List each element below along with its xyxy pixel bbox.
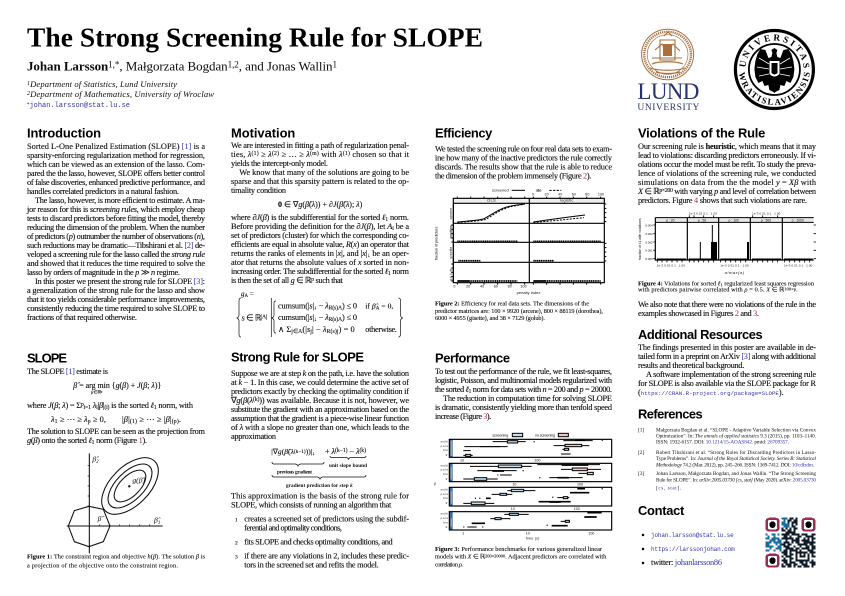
text block: ∇g(β(λ(k))) was available. Because it is not, however, we bbox=[230, 396, 409, 405]
text block: lasso by orders of magnitude in the p ≫ n regime. bbox=[27, 268, 180, 277]
text block: consistently reducing the time required to solve SLOPE to bbox=[27, 304, 205, 313]
axes labels: 1 bbox=[462, 531, 464, 535]
text block with equations: The SLOPE [1] estimate is bbox=[27, 367, 108, 376]
legend: active bbox=[536, 188, 542, 193]
axes labels: multi bbox=[441, 488, 448, 492]
text block: ine how many of the inactive predictors the rule correctly bbox=[435, 154, 613, 163]
axes labels: 100 bbox=[534, 458, 540, 462]
affiliations: 1Department of Statistics, Lund University bbox=[27, 79, 177, 89]
contact list: https://larssonjohan.com bbox=[651, 546, 735, 553]
text block: To test out the performance of the rule, we fit least-squares, bbox=[435, 367, 612, 376]
gradient approximation equation bbox=[271, 447, 367, 489]
reference list: Type Problems”. In: Journal of the Royal Statistical Society. Series B: Statistical bbox=[656, 455, 817, 462]
heading: Violations of the Rule bbox=[638, 125, 765, 140]
authors: Johan Larsson1,*, Małgorzata Bogdan1,2, and Jonas Wallin1 bbox=[27, 59, 337, 74]
icon: Lund seal bbox=[642, 29, 694, 80]
logo: University of Wroclaw seal: WRATISLAVIENSIS bbox=[739, 72, 810, 106]
figure caption: models with X ∈ ℝ200×20000. Adjacent predictors are correlated with bbox=[435, 553, 607, 560]
text block bbox=[637, 142, 817, 205]
legend: no screening bbox=[535, 432, 555, 437]
text block: X ∈ ℝp×200 with varying p and level of correlation between bbox=[637, 187, 817, 196]
text block: increasing order. The subdifferential for the sorted ℓ1 norm bbox=[231, 267, 410, 277]
chart: violations histogram: 1e-3 0.01 0.1 1.00 bbox=[657, 264, 685, 268]
reference list: Rule for SLOPE”. In: arXiv:2005.03730 [cs, stat] (May 2020). arXiv: 2005.03730 bbox=[656, 476, 816, 483]
text block: of predictors (p) outnumber the number of observations (n), bbox=[27, 232, 205, 241]
text block: A software implementation of the strong screening rule bbox=[646, 370, 816, 379]
chart: violations histogram: ρ : 500 bbox=[761, 218, 771, 222]
text block: In this poster we present the strong rule for SLOPE [3]: bbox=[35, 277, 205, 286]
panel: SLOPE bbox=[27, 351, 206, 570]
figure caption: a projection of the objective onto the constraint region. bbox=[27, 562, 178, 570]
axes labels: 10 bbox=[526, 531, 530, 535]
axes labels: 100 bbox=[588, 531, 594, 535]
subdifferential equation: ∧ Σj∈A(|sj| − λR(s)j) = 0 bbox=[278, 325, 355, 335]
figure caption: Figure 2: Efficiency for real data sets. The dimensions of the bbox=[435, 300, 589, 307]
figure caption bbox=[638, 280, 815, 294]
text block: of false discoveries, enhanced predictive performance, and bbox=[27, 178, 206, 187]
text block: Suppose we are at step k on the path, i.e. have the solution bbox=[231, 369, 410, 378]
subdifferential equation: if β̂A = 0, bbox=[365, 302, 393, 312]
text block bbox=[435, 145, 613, 181]
axes labels: g bbox=[446, 476, 448, 480]
numbered list: 2 bbox=[235, 541, 238, 547]
text block: sparse and that this sparsity pattern is related to the op- bbox=[231, 177, 409, 186]
text block: results and theoretical background. bbox=[638, 361, 744, 370]
gradient approximation equation: previous gradient bbox=[277, 470, 312, 476]
text block: the sorted ℓ1 norm for data sets with n = 200 and p = 20000. bbox=[435, 385, 612, 395]
text block bbox=[231, 141, 410, 285]
text block: lead to violations: discarding predictors erroneously. If vi- bbox=[638, 151, 816, 160]
panel: contact bbox=[638, 503, 816, 567]
chart: violations histogram bbox=[638, 212, 816, 275]
chart: violations histogram: 1e-3 0.01 0.1 1.00 bbox=[720, 264, 749, 268]
panel: efficiency bbox=[434, 125, 613, 322]
contact list: twitter: johanlarsson86 bbox=[651, 558, 722, 567]
axes labels: 10 bbox=[511, 507, 515, 511]
text block: such reductions may be dramatic—Tibshirani et al. [2] de- bbox=[27, 241, 205, 250]
text block: yields the intercept-only model. bbox=[231, 159, 328, 168]
axes labels: 10 bbox=[512, 482, 516, 486]
chart: fraction of predictors by penalty index: logistic bbox=[560, 198, 573, 203]
text block: Before providing the definition for the ∂J(β), let Ai be a bbox=[231, 222, 409, 232]
text block: logistic, Poisson, and multinomial models regularized with bbox=[435, 376, 613, 385]
header bbox=[27, 22, 483, 110]
text block: examples showcased in Figures 2 and 3. bbox=[638, 309, 759, 318]
text block: Our screening rule is heuristic, which means that it may bbox=[638, 142, 817, 151]
figure caption: with predictors pairwise correlated with ρ = 0.5. X ∈ ℝ100×p. bbox=[638, 287, 798, 294]
axes labels: time (s) bbox=[526, 537, 539, 541]
text block: assumption that the gradient is a piece-wise linear function bbox=[231, 414, 410, 423]
text block: (https://CRAN.R-project.org/package=SLOPE). bbox=[638, 388, 784, 397]
figure caption bbox=[435, 546, 607, 568]
subdifferential equation: otherwise. bbox=[365, 325, 397, 334]
axes labels: 10 bbox=[460, 458, 464, 462]
text block: for SLOPE is also available via the SLOPE package for R bbox=[638, 379, 816, 388]
text block bbox=[230, 369, 410, 441]
reference list: [3] bbox=[638, 471, 644, 477]
figure caption: predictor matrices are: 100 × 9920 (arcene), 800 × 88119 (dorothea), bbox=[435, 308, 603, 315]
panel: introduction bbox=[26, 125, 206, 322]
chart: constraint region and objective bbox=[67, 448, 168, 553]
axes labels: 100 bbox=[574, 507, 580, 511]
text block: returns the ranks of elements in |x|, and |x|↓ be an oper- bbox=[231, 249, 409, 259]
text block: a generalization of the strong rule for the lasso and show bbox=[27, 286, 205, 295]
figure caption: Figure 3: Performance benchmarks for various generalized linear bbox=[435, 546, 603, 553]
text block bbox=[26, 142, 206, 322]
chart: fraction of predictors by penalty index: penalty index bbox=[517, 290, 540, 295]
numbered list: ferential and optimality conditions, bbox=[244, 524, 342, 533]
text block: is dramatic, consistently yielding more than tenfold speed bbox=[435, 403, 613, 412]
gradient approximation equation: gradient prediction for step k bbox=[286, 483, 353, 489]
figure caption: Figure 1: The constraint region and objective h(β). The solution β is bbox=[27, 554, 206, 560]
text block: ator that returns the absolute values of x sorted in non- bbox=[231, 258, 409, 267]
text block: We know that many of the solutions are going to be bbox=[239, 168, 409, 177]
text block with equations: g(β) onto the sorted ℓ1 norm (Figure 1). bbox=[27, 436, 147, 446]
data curves bbox=[457, 204, 601, 281]
chart: fraction of predictors by penalty index: fraction of predictors bbox=[434, 227, 439, 260]
axes labels: multi bbox=[441, 440, 448, 444]
text block: 0 ∈ ∇g(β̂(λ)) + ∂J(β̂(λ); λ) bbox=[278, 200, 363, 209]
text block: We are interested in fitting a path of regularization penal- bbox=[231, 141, 409, 150]
subdifferential equation: gA = bbox=[241, 290, 254, 299]
text block bbox=[231, 492, 409, 510]
text block with equations: |β|(1) ≥ ⋯ ≥ |β|(p). bbox=[122, 415, 181, 425]
text block: set of predictors (cluster) for which the corresponding co- bbox=[231, 231, 409, 240]
chart: fraction of predictors by penalty index: golub bbox=[449, 269, 453, 281]
legend: screening bbox=[492, 432, 508, 437]
text block: increase (Figure 3). bbox=[435, 412, 491, 421]
chart: violations histogram: fraction of ℓ1 with violations bbox=[638, 218, 642, 260]
heading: Strong Rule for SLOPE bbox=[231, 350, 364, 365]
chart: violations histogram: 1e-3 0.01 0.1 1.00 bbox=[689, 212, 717, 216]
axes labels: bin bbox=[443, 472, 448, 476]
text block: pared the the lasso, however, SLOPE offers better control bbox=[27, 169, 206, 178]
chart: violations histogram: ρ : 50 bbox=[698, 218, 706, 222]
text block: lence of violations of the screening rule, we conducted bbox=[638, 169, 817, 178]
reference list: ISSN: 1932-6157. DOI: 10.1214/15-AOAS842. pmid: 26709357. bbox=[656, 439, 789, 445]
heading: References bbox=[638, 406, 703, 421]
text block: discards. The results show that the rule is able to reduce bbox=[435, 163, 612, 172]
chart: fraction of predictors by penalty index bbox=[434, 188, 606, 295]
chart: fraction of predictors by penalty index: 0 20 40 60 80 100 bbox=[532, 192, 604, 196]
text block: fractions of that required otherwise. bbox=[27, 313, 137, 322]
legend: screened bbox=[492, 188, 509, 193]
heading: Performance bbox=[435, 350, 510, 365]
chart: fraction of predictors by penalty index: OLS bbox=[487, 198, 496, 203]
text block with equations bbox=[27, 367, 206, 446]
gradient approximation equation: |∇g(β̂(λ(k−1)))|↓ bbox=[271, 447, 315, 457]
axes labels: ρ bbox=[434, 481, 436, 485]
chart: violations histogram: ρ : 1000 bbox=[792, 218, 804, 222]
heading: Additional Resources bbox=[638, 327, 763, 342]
logo: University of Wroclaw seal bbox=[734, 28, 815, 110]
text block: SLOPE, which consists of running an algorithm that bbox=[231, 501, 392, 510]
axes labels: bin bbox=[443, 496, 448, 500]
chart: violations histogram: ρ : 20 bbox=[666, 218, 675, 222]
text block: We tested the screening rule on four real data sets to exam- bbox=[435, 145, 612, 154]
figure caption: 6000 × 4955 (gisette), and 38 × 7129 (golub). bbox=[435, 315, 545, 322]
heading: Contact bbox=[638, 503, 685, 518]
text block: predictors exactly by checking the optimality condition if bbox=[231, 387, 409, 396]
panel: references bbox=[638, 406, 817, 491]
text block: predictors. Figure 4 shows that such violations are rare. bbox=[638, 196, 807, 205]
text block: This approximation is the basis of the strong rule for bbox=[231, 492, 409, 501]
text block: ties, λ(1) ≥ λ(2) ≥ … ≥ λ(m) with λ(1) chosen so that it bbox=[231, 150, 410, 159]
logo: University of Wroclaw seal: UNIVERSITAS bbox=[739, 34, 810, 68]
numbered list: fits SLOPE and checks optimality conditions, and bbox=[244, 538, 394, 547]
chart: violations histogram: 1e-3 0.01 0.1 1.00 bbox=[784, 264, 813, 268]
panel: violations of the rule bbox=[637, 125, 817, 318]
text block: and showed that it reduces the time required to solve the bbox=[27, 259, 205, 268]
reference list: [1] bbox=[638, 427, 644, 433]
panel: performance bbox=[434, 350, 613, 568]
axes labels: multi bbox=[441, 512, 448, 516]
axes labels: pois bbox=[441, 468, 448, 472]
reference list: [cs, stat]. bbox=[656, 485, 681, 491]
text block: which can be viewed as an extension of the lasso. Com- bbox=[27, 160, 205, 169]
chart: violations histogram: 0.002 bbox=[645, 240, 653, 244]
chart: fraction of predictors by penalty index: gisette bbox=[449, 247, 453, 259]
text block bbox=[638, 300, 816, 318]
figure caption bbox=[435, 300, 603, 322]
axes labels: 100 bbox=[577, 482, 583, 486]
reference list: [2] bbox=[638, 450, 644, 456]
panel: additional resources bbox=[638, 327, 817, 397]
wordmark: LUND bbox=[637, 79, 699, 104]
chart: constraint region and objective: β̂ bbox=[154, 516, 158, 525]
boxplots bbox=[463, 440, 603, 527]
text block: veloped a screening rule for the lasso called the strong rule bbox=[27, 250, 205, 259]
text block: olations occur the model must be refit. To study the preva- bbox=[638, 160, 816, 169]
chart: violations histogram: σ/max(σ) bbox=[725, 270, 745, 275]
logo: Lund University: UNIVERSITY bbox=[637, 103, 700, 113]
chart: violations histogram: 1e-3 0.01 0.1 1.00 bbox=[752, 212, 781, 216]
text block: that it too yields considerable performance improvements, bbox=[27, 295, 205, 304]
text block: Sorted L-One Penalized Estimation (SLOPE) [1] is a bbox=[27, 142, 205, 151]
numbered list: creates a screened set of predictors using the subdif- bbox=[244, 515, 409, 524]
title: The Strong Screening Rule for SLOPE bbox=[27, 22, 483, 53]
chart: violations histogram: 0.001 bbox=[645, 249, 653, 253]
subdifferential equation: cumsum(|s|↓ − λR(s)A) ≤ 0 bbox=[278, 313, 357, 323]
text block: jor reason for this is screening rules, which employ cheap bbox=[26, 205, 205, 214]
axes labels: multi bbox=[441, 463, 448, 467]
text block: We also note that there were no violations of the rule in the bbox=[638, 300, 816, 309]
text block: tests to discard predictors before fitting the model, thereby bbox=[27, 214, 206, 223]
numbered list: if there are any violations in 2, includes these predic- bbox=[244, 552, 409, 561]
axes labels: bin bbox=[443, 520, 448, 524]
text block: efficients are equal in absolute value, R(x) an operator that bbox=[231, 240, 410, 249]
text block: The reduction in computation time for solving SLOPE bbox=[443, 394, 612, 403]
text block: handles correlated predictors in a natural fashion. bbox=[27, 187, 179, 196]
heading: Efficiency bbox=[435, 125, 493, 140]
reference list: Małgorzata Bogdan et al. “SLOPE - Adaptive Variable Selection via Convex bbox=[656, 426, 816, 433]
gradient approximation equation: + λ(k−1) − λ(k) bbox=[325, 447, 366, 456]
gradient approximation equation: unit slope bound bbox=[329, 463, 367, 469]
legend bbox=[492, 188, 561, 193]
subdifferential equation bbox=[237, 290, 402, 337]
reference list: Methodology 74.2 (Mar. 2012), pp. 245–266. ISSN: 1369-7412. DOI: 10/cdfzdm. bbox=[655, 461, 814, 468]
numbered list bbox=[235, 515, 409, 570]
chart: constraint region and objective: β̂ bbox=[92, 455, 96, 464]
icon: eagle bbox=[754, 48, 794, 93]
numbered list: tors in the screened set and refits the model. bbox=[244, 561, 379, 570]
axes labels: g bbox=[446, 501, 448, 505]
text block bbox=[435, 367, 613, 421]
text block with equations: β∈ℝᵖ bbox=[90, 390, 103, 394]
numbered list: 3 bbox=[235, 555, 238, 561]
figure caption: correlation ρ. bbox=[435, 561, 463, 568]
text block: where ∂J(β) is the subdifferential for the sorted ℓ1 norm. bbox=[231, 213, 409, 223]
reference list: Robert Tibshirani et al. “Strong Rules for Discarding Predictors in Lasso- bbox=[656, 449, 816, 456]
panel: strong rule for SLOPE bbox=[230, 350, 410, 570]
chart: benchmark boxplots bbox=[434, 432, 612, 541]
axes labels: pois bbox=[441, 516, 448, 520]
icon: QR code bbox=[766, 519, 816, 567]
text block: at k − 1. In this case, we could determine the active set of bbox=[231, 378, 409, 387]
text block bbox=[638, 343, 817, 397]
text block: timality condition bbox=[231, 186, 287, 195]
chart: violations histogram: ρ : 100 bbox=[729, 218, 739, 222]
chart: constraint region and objective: g(β̂) bbox=[132, 475, 146, 484]
text block with equations: where J(β; λ) = Σpi=1 λi|β|(i) is the sorted ℓ1 norm, with bbox=[27, 401, 194, 411]
axes labels bbox=[434, 440, 594, 541]
figure caption: Figure 4: Violations for sorted ℓ1 regularized least squares regression bbox=[638, 280, 815, 288]
strip labels bbox=[449, 439, 453, 530]
text block: The findings presented in this poster are available in de- bbox=[638, 343, 816, 352]
heading: SLOPE bbox=[27, 351, 67, 366]
reference list: Johan Larsson, Małgorzata Bogdan, and Jonas Wallin. “The Strong Screening bbox=[656, 470, 816, 477]
reference list: Optimization”. In: The annals of applied statistics 9.3 (2015), pp. 1103–1140. bbox=[656, 432, 816, 439]
text block: is then the set of all g ∈ ℝp such that bbox=[231, 276, 343, 285]
legend bbox=[492, 432, 568, 437]
affiliations: *johan.larsson@stat.lu.se bbox=[27, 102, 130, 110]
figure caption bbox=[27, 554, 206, 570]
panel: motivation bbox=[231, 125, 410, 337]
text block: simulations on data from the the model y = Xβ with bbox=[638, 178, 817, 187]
axes labels: pois bbox=[441, 444, 448, 448]
axes labels: bin bbox=[443, 448, 448, 452]
chart: fraction of predictors by penalty index: arcene bbox=[449, 208, 453, 219]
subdifferential equation: s ∈ ℝ|A| bbox=[242, 314, 267, 322]
numbered list: 1 bbox=[235, 518, 238, 524]
reference list bbox=[638, 426, 817, 491]
text block with equations: β̂ = arg min {g(β) + J(β; λ)} bbox=[72, 381, 161, 390]
chart: constraint region and objective: 1 bbox=[158, 521, 160, 526]
axes labels: pois bbox=[441, 492, 448, 496]
axes labels: g bbox=[446, 453, 448, 457]
text block: of λ with a slope no greater than one, which leads to the bbox=[231, 423, 409, 432]
chart: fraction of predictors by penalty index: 0 20 40 60 80 100 bbox=[453, 284, 527, 288]
chart: fraction of predictors by penalty index: dorothea bbox=[449, 224, 453, 239]
axes labels: g bbox=[446, 525, 448, 529]
subdifferential equation: cumsum(|s|↓ − λR(s)A) ≤ 0 bbox=[278, 302, 357, 312]
text block: approximation bbox=[231, 432, 277, 441]
chart: constraint region and objective: 2 bbox=[96, 460, 99, 465]
text block: tailed form in a preprint on ArXiv [3] along with additional bbox=[638, 352, 817, 361]
heading: Motivation bbox=[231, 125, 295, 140]
text block: substitute the gradient with an approximation based on the bbox=[231, 405, 409, 414]
contact list bbox=[642, 532, 735, 567]
contact list: johan.larsson@stat.lu.se bbox=[651, 532, 734, 539]
chart: violations histogram: 0.004 bbox=[645, 223, 653, 227]
chart: violations histogram: 0.000 bbox=[645, 257, 653, 261]
heading: Introduction bbox=[27, 125, 101, 140]
text block: reducing the dimension of the problem. When the number bbox=[27, 223, 205, 232]
chart: constraint region and objective: β̂ bbox=[97, 514, 104, 523]
affiliations bbox=[27, 79, 214, 110]
chart: violations histogram: 0.003 bbox=[645, 232, 653, 236]
affiliations: 2Department of Mathematics, University of Wroclaw bbox=[27, 89, 214, 99]
logo: Lund University bbox=[637, 29, 700, 113]
text block with equations: λ1 ≥ ⋯ ≥ λp ≥ 0, bbox=[50, 415, 106, 425]
text block: The lasso, however, is more efficient to estimate. A ma- bbox=[35, 196, 205, 205]
text block with equations: The solution to SLOPE can be seen as the projection from bbox=[27, 427, 206, 436]
text block: the dimension of the problem immensely (Figure 2). bbox=[435, 172, 591, 181]
text block: sparsity-enforcing regularization method for regression, bbox=[27, 151, 205, 160]
violation bars bbox=[657, 225, 813, 260]
